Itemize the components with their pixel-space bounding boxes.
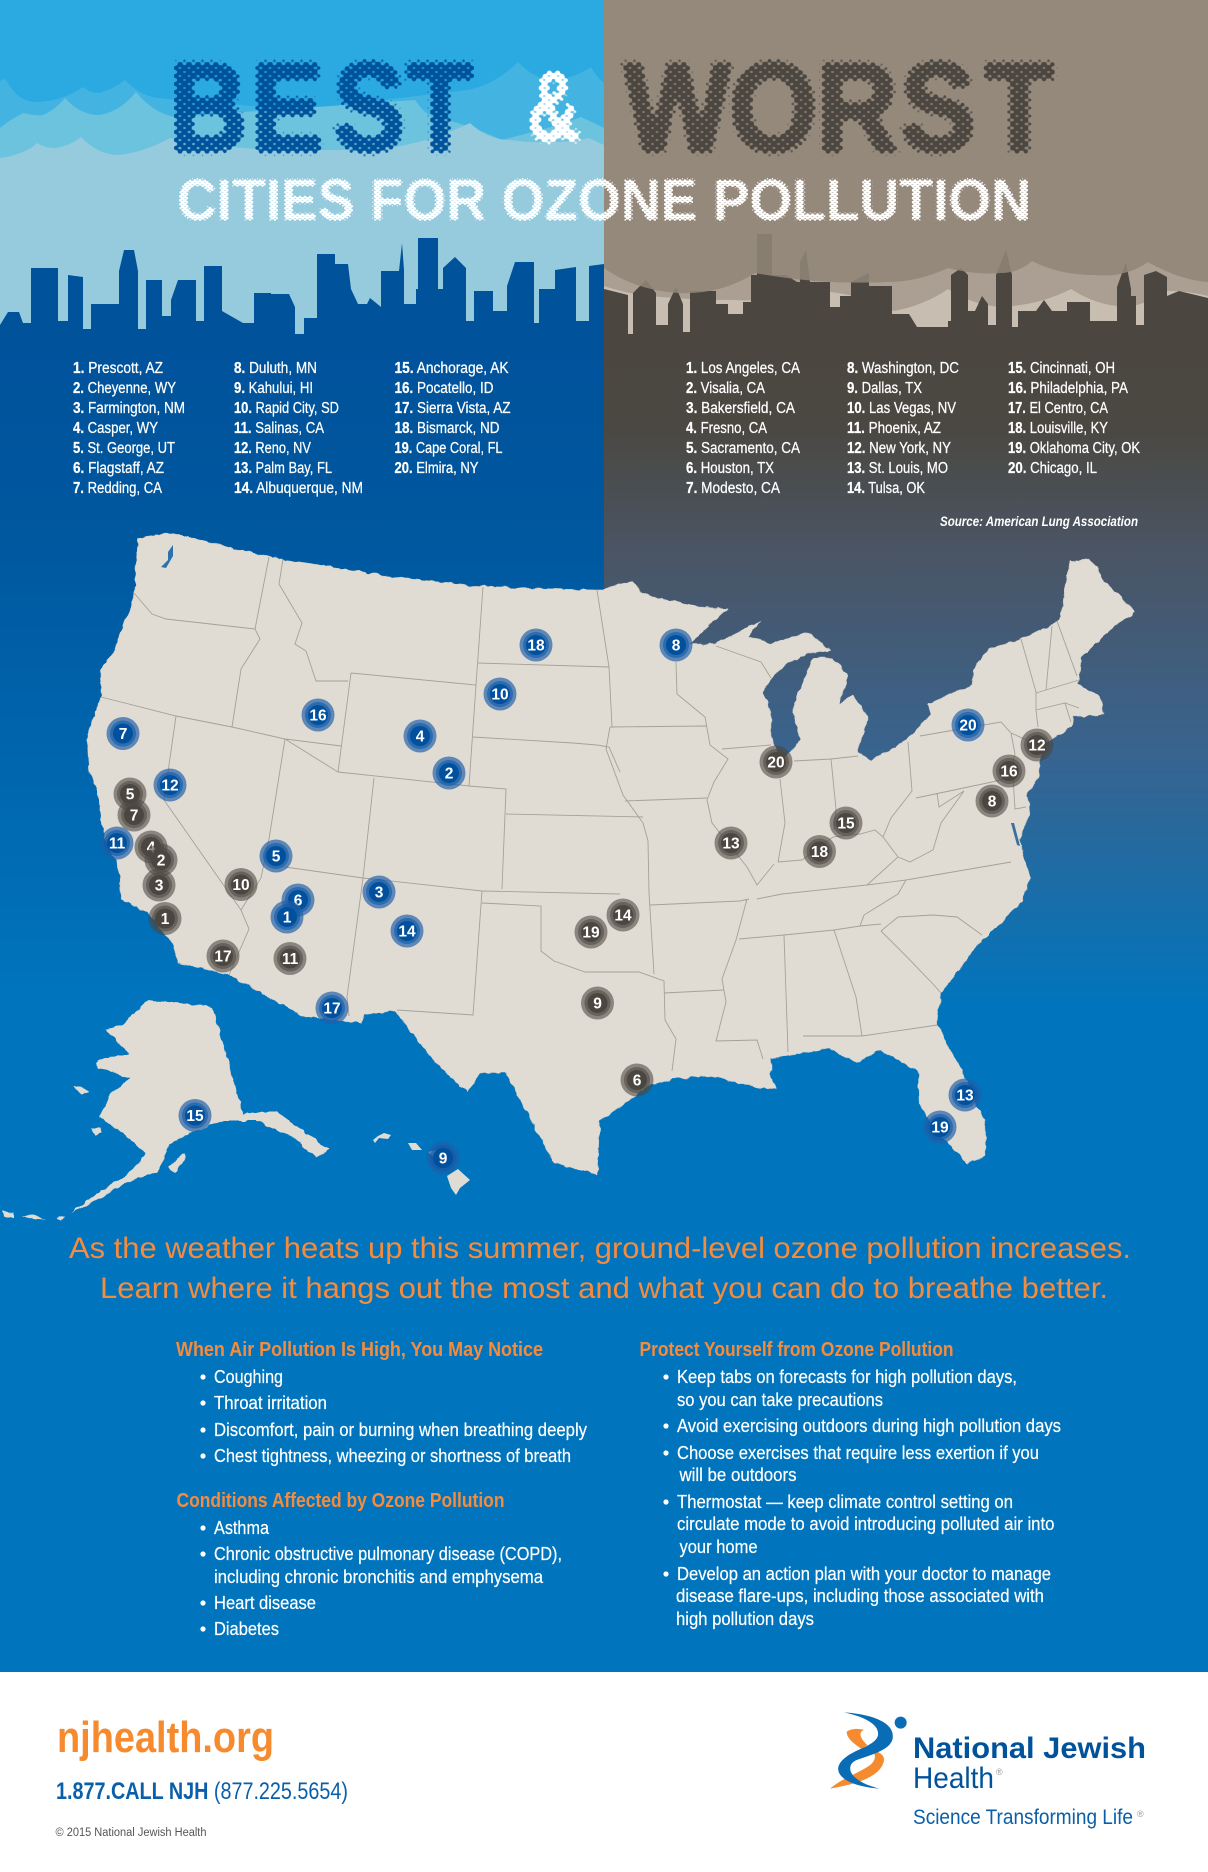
- marker: best 3: 3: [375, 884, 384, 902]
- marker: worst 15: 15: [837, 816, 855, 832]
- marker: best 5: [260, 840, 292, 872]
- protection list: so you can take precautions: [677, 1390, 883, 1410]
- marker: best 15: 15: [186, 1108, 204, 1125]
- marker: best 10: 10: [491, 686, 509, 704]
- list: worst cities: 8. Washington, DC: [847, 360, 959, 377]
- marker: best 14: [390, 914, 424, 948]
- list: worst cities: 2. Visalia, CA: [686, 380, 766, 397]
- list: worst cities: 9. Dallas, TX: [847, 380, 923, 397]
- symptoms list: Discomfort, pain or burning when breathing deeply: [214, 1420, 587, 1440]
- list: best cities: 8. Duluth, MN: [234, 360, 317, 377]
- marker: best 13: 13: [956, 1088, 974, 1104]
- subtitle: CITIES FOR OZONE POLLUTION: [177, 168, 1031, 233]
- marker: worst 6: [620, 1064, 654, 1096]
- protection list: disease flare-ups, including those associated with: [676, 1586, 1044, 1606]
- protection list: Thermostat — keep climate control setting on: [677, 1492, 1013, 1512]
- marker: best 17: [316, 992, 348, 1024]
- marker: best 9: [426, 1142, 460, 1174]
- marker: worst 11: 11: [282, 951, 299, 968]
- list: best cities: 5. St. George, UT: [73, 440, 175, 457]
- marker: worst 5: [114, 778, 146, 810]
- marker: worst 3: 3: [155, 878, 164, 894]
- marker: worst 10: [224, 868, 258, 901]
- marker: worst 17: [206, 940, 240, 972]
- list: best cities: [73, 360, 510, 497]
- list: best cities: 3. Farmington, NM: [73, 400, 185, 417]
- title word: WORST: O: [729, 37, 817, 178]
- title word: BEST: E: [251, 37, 323, 178]
- conditions list: [200, 1518, 562, 1639]
- list: worst cities: 12. New York, NY: [847, 440, 951, 457]
- logo: National Jewish Health: [830, 1712, 1146, 1829]
- list: best cities: 17. Sierra Vista, AZ: [394, 400, 510, 417]
- marker: best 4: 4: [416, 728, 425, 746]
- marker: best 3: [362, 876, 396, 908]
- map markers: worst cities: [114, 728, 1054, 1096]
- marker: worst 10: 10: [232, 877, 250, 894]
- icon: helix figure: [830, 1712, 907, 1789]
- map: Hawaii: [373, 1133, 470, 1195]
- marker: best 1: [270, 900, 304, 934]
- heading: conditions: Conditions Affected by Ozone Pollution: [176, 1490, 504, 1512]
- list: worst cities: 5. Sacramento, CA: [686, 440, 801, 457]
- marker: best 19: 19: [931, 1120, 949, 1136]
- title word: BEST: B: [169, 37, 247, 178]
- marker: worst 9: [581, 986, 614, 1020]
- marker: best 6: [282, 884, 314, 916]
- list: best cities: 9. Kahului, HI: [234, 380, 313, 397]
- protection list: [663, 1367, 1061, 1629]
- marker: best 7: [106, 717, 140, 750]
- headline callout: As the weather heats up this summer, ground-level ozone pollution increases.: [69, 1232, 1131, 1265]
- list: best cities: 2. Cheyenne, WY: [73, 380, 176, 397]
- title word: WORST: W: [624, 37, 732, 178]
- marker: best 11: [100, 826, 134, 860]
- list: best cities: 20. Elmira, NY: [394, 460, 478, 477]
- marker: worst 15: [830, 806, 862, 840]
- map: United States: [2, 533, 1135, 1221]
- map: contiguous states: [87, 533, 1135, 1174]
- list: worst cities: 15. Cincinnati, OH: [1008, 360, 1115, 377]
- list: worst cities: [686, 360, 1141, 497]
- list: best cities: 12. Reno, NV: [234, 440, 312, 457]
- headline callout: [69, 1232, 1131, 1305]
- marker: worst 4: 4: [147, 840, 156, 856]
- marker: worst 11: [274, 942, 306, 975]
- marker: worst 16: 16: [1000, 764, 1018, 780]
- marker: best 11: 11: [109, 836, 126, 852]
- marker: best 19: [924, 1110, 956, 1144]
- symptoms list: [200, 1367, 587, 1466]
- marker: best 8: [660, 628, 692, 662]
- marker: worst 1: [148, 902, 182, 935]
- marker: best 8: 8: [672, 638, 681, 654]
- marker: worst 1: 1: [161, 911, 170, 928]
- title word: BEST: T: [407, 37, 473, 178]
- marker: worst 16: [992, 754, 1026, 788]
- logo wordmark: National Jewish: [913, 1732, 1146, 1765]
- marker: best 17: 17: [323, 1000, 341, 1018]
- skyline: clean city: [0, 238, 604, 345]
- marker: worst 19: 19: [582, 924, 600, 942]
- map markers: best cities: [100, 628, 984, 1174]
- marker: best 9: 9: [439, 1150, 448, 1168]
- marker: best 14: 14: [398, 924, 416, 940]
- list: worst cities: 17. El Centro, CA: [1008, 400, 1109, 417]
- marker: best 16: [302, 698, 334, 732]
- list: best cities: 10. Rapid City, SD: [234, 400, 339, 417]
- marker: worst 8: 8: [988, 794, 997, 810]
- marker: best 5: 5: [272, 848, 281, 866]
- marker: worst 6: 6: [633, 1072, 642, 1090]
- marker: worst 14: 14: [614, 908, 632, 924]
- conditions list: Diabetes: [214, 1619, 279, 1639]
- marker: best 20: 20: [959, 718, 977, 734]
- conditions list: Asthma: [214, 1518, 270, 1538]
- marker: best 2: [432, 756, 466, 790]
- marker: worst 5: 5: [126, 786, 135, 804]
- marker: worst 9: 9: [593, 996, 602, 1012]
- conditions list: Heart disease: [214, 1593, 316, 1613]
- list: best cities: 6. Flagstaff, AZ: [73, 460, 164, 477]
- list: best cities: 11. Salinas, CA: [234, 420, 325, 437]
- marker: best 20: [952, 708, 984, 742]
- marker: worst 13: 13: [722, 836, 740, 852]
- conditions list: including chronic bronchitis and emphysema: [214, 1567, 544, 1587]
- marker: best 6: 6: [294, 892, 303, 910]
- list: worst cities: 18. Louisville, KY: [1008, 420, 1108, 437]
- list: best cities: 14. Albuquerque, NM: [234, 480, 363, 497]
- copyright: © 2015 National Jewish Health: [56, 1827, 206, 1839]
- panel: protect yourself: [640, 1339, 1061, 1629]
- panel: smoggy sky (right): [604, 0, 1208, 340]
- marker: best 13: [948, 1078, 982, 1112]
- symptoms list: Coughing: [214, 1367, 283, 1387]
- conditions list: Chronic obstructive pulmonary disease (COPD),: [214, 1544, 562, 1564]
- marker: best 12: 12: [161, 778, 179, 794]
- list: best cities: 7. Redding, CA: [73, 480, 163, 497]
- marker: worst 2: [144, 844, 178, 876]
- marker: worst 2: 2: [157, 852, 165, 870]
- title: BEST & WORST: [169, 37, 1054, 178]
- marker: worst 12: 12: [1028, 738, 1046, 754]
- tagline: Science Transforming Life: [913, 1806, 1133, 1829]
- marker: worst 7: [118, 798, 150, 832]
- source note: Source: American Lung Association: [940, 514, 1138, 529]
- marker: best 12: [154, 768, 186, 802]
- list: worst cities: 14. Tulsa, OK: [847, 480, 926, 497]
- marker: worst 19: [574, 916, 608, 948]
- protection list: Choose exercises that require less exertion if you: [677, 1443, 1039, 1463]
- title word: BEST: [169, 37, 473, 178]
- protection list: high pollution days: [676, 1609, 814, 1629]
- title word: WORST: S: [900, 37, 976, 178]
- list: best cities: 19. Cape Coral, FL: [394, 440, 503, 457]
- list: worst cities: 6. Houston, TX: [686, 460, 775, 477]
- panel: symptoms: [176, 1339, 587, 1466]
- marker: worst 12: [1020, 728, 1054, 762]
- marker: best 10: [484, 678, 516, 710]
- list: best cities: 16. Pocatello, ID: [394, 380, 494, 397]
- marker: worst 20: 20: [767, 754, 785, 772]
- title word: ampersand: &: [527, 51, 581, 163]
- list: worst cities: 11. Phoenix, AZ: [847, 420, 941, 437]
- panel: clean sky (left): [0, 0, 604, 340]
- panel: conditions: [176, 1490, 562, 1639]
- map: state borders: [101, 557, 1079, 1071]
- list: best cities: 4. Casper, WY: [73, 420, 158, 437]
- skyline: smoggy city: [604, 234, 1208, 345]
- marker: best 18: 18: [527, 638, 545, 654]
- marker: worst 8: [976, 784, 1008, 818]
- registered mark: ®: [996, 1767, 1003, 1777]
- marker: worst 20: [760, 746, 792, 778]
- list: best cities: 15. Anchorage, AK: [394, 360, 509, 377]
- list: worst cities: 10. Las Vegas, NV: [847, 400, 957, 417]
- list: worst cities: 19. Oklahoma City, OK: [1008, 440, 1141, 457]
- protection list: will be outdoors: [679, 1465, 796, 1485]
- marker: worst 17: 17: [214, 948, 232, 966]
- protection list: your home: [680, 1537, 758, 1557]
- list: worst cities: 13. St. Louis, MO: [847, 460, 948, 477]
- protection list: Keep tabs on forecasts for high pollution days,: [677, 1367, 1017, 1387]
- marker: worst 14: [606, 898, 640, 932]
- protection list: Avoid exercising outdoors during high pollution days: [677, 1416, 1061, 1436]
- symptoms list: Throat irritation: [214, 1393, 327, 1413]
- heading: protect yourself: Protect Yourself from Ozone Pollution: [640, 1339, 954, 1361]
- website: njhealth.org: [57, 1713, 274, 1762]
- headline callout: Learn where it hangs out the most and what you can do to breathe better.: [100, 1272, 1108, 1305]
- marker: best 18: [520, 628, 552, 662]
- marker: worst 18: 18: [811, 844, 828, 861]
- marker: worst 18: [803, 835, 836, 868]
- map: Alaska: [2, 1000, 328, 1221]
- logo wordmark second line: Health: [913, 1762, 994, 1795]
- marker: best 7: 7: [119, 726, 127, 743]
- title word: WORST: R: [816, 37, 898, 178]
- marker: worst 4: [134, 830, 168, 864]
- title word: BEST: S: [333, 37, 405, 178]
- marker: worst 3: [142, 868, 176, 902]
- marker: worst 7: 7: [130, 808, 138, 824]
- list: worst cities: 7. Modesto, CA: [686, 480, 781, 497]
- symptoms list: Chest tightness, wheezing or shortness of breath: [214, 1446, 571, 1466]
- title word: WORST: T: [985, 37, 1054, 178]
- marker: best 15: [178, 1099, 212, 1132]
- list: worst cities: 4. Fresno, CA: [686, 420, 768, 437]
- marker: best 1: 1: [283, 910, 292, 926]
- tagline registered mark: ®: [1137, 1809, 1144, 1819]
- list: worst cities: 1. Los Angeles, CA: [686, 360, 801, 377]
- phone number: 1.877.CALL NJH (877.225.5654): [56, 1778, 348, 1805]
- list: worst cities: 20. Chicago, IL: [1008, 460, 1097, 477]
- list: worst cities: 16. Philadelphia, PA: [1008, 380, 1129, 397]
- list: worst cities: 3. Bakersfield, CA: [686, 400, 796, 417]
- title word: WORST: [624, 37, 1054, 178]
- marker: best 2: 2: [445, 766, 453, 782]
- marker: best 16: 16: [309, 708, 327, 724]
- protection list: Develop an action plan with your doctor to manage: [677, 1564, 1051, 1584]
- marker: best 4: [404, 720, 436, 752]
- list: best cities: 1. Prescott, AZ: [73, 360, 163, 377]
- panel: lower gradient fields: [0, 340, 1208, 1040]
- list: best cities: 13. Palm Bay, FL: [234, 460, 332, 477]
- marker: worst 13: [714, 826, 748, 860]
- protection list: circulate mode to avoid introducing polluted air into: [677, 1514, 1054, 1534]
- footer band: [0, 1672, 1208, 1872]
- heading: symptoms: When Air Pollution Is High, You May Notice: [176, 1339, 543, 1361]
- list: best cities: 18. Bismarck, ND: [394, 420, 500, 437]
